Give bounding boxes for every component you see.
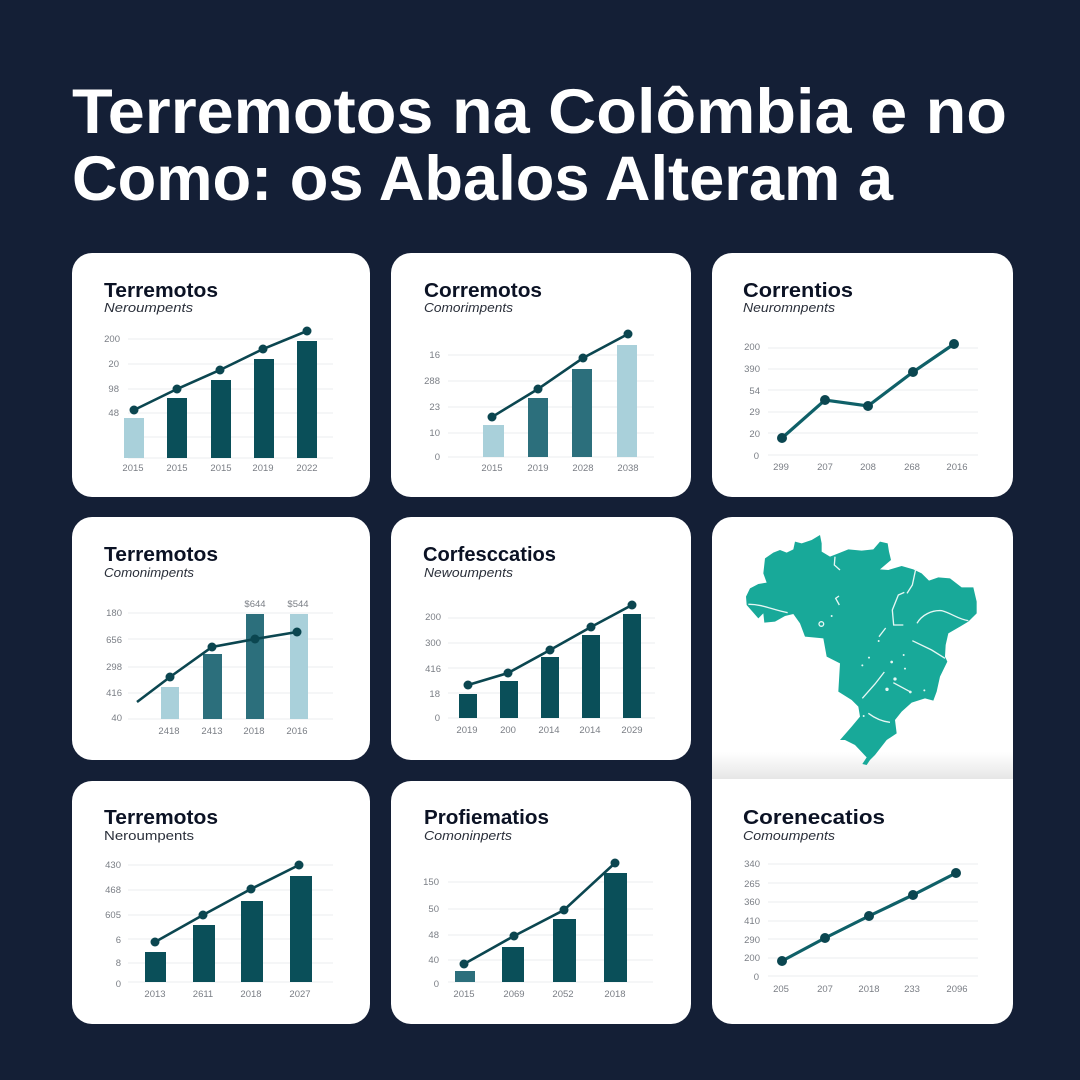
chart: 2015 xyxy=(481,463,503,474)
chart: 656 xyxy=(106,635,122,646)
chart: 605 xyxy=(105,910,121,921)
panel: Terremotos bar and line chart, bottom left xyxy=(72,781,370,1024)
chart: 2015 xyxy=(166,463,188,474)
chart: 2019 xyxy=(252,463,274,474)
chart: 2018 xyxy=(858,984,880,995)
chart: 40 xyxy=(428,955,439,966)
chart: 207 xyxy=(817,462,833,473)
chart: 40 xyxy=(111,713,122,724)
panel: map xyxy=(712,517,1013,780)
title xyxy=(72,77,1007,214)
panel: Corenecatios line chart, bottom right xyxy=(712,780,1013,1024)
panel: Corremotos bar and line chart, top middle xyxy=(391,253,691,497)
chart xyxy=(105,860,333,1000)
chart: 288 xyxy=(424,376,440,387)
title: Como: os Abalos Alteram a xyxy=(72,144,894,214)
subheading: Newoumpents xyxy=(424,565,514,580)
chart: 2016 xyxy=(286,726,308,737)
chart: 200 xyxy=(744,342,760,353)
chart xyxy=(425,600,655,736)
chart: 2015 xyxy=(453,989,475,1000)
chart: 50 xyxy=(428,904,439,915)
chart: 390 xyxy=(744,364,760,375)
heading: Terremotos xyxy=(104,807,218,829)
chart: 2418 xyxy=(158,726,180,737)
chart: 16 xyxy=(429,350,440,361)
panel: Terremotos bar and line chart, middle left xyxy=(72,517,370,760)
chart: 268 xyxy=(904,462,920,473)
heading: Terremotos xyxy=(104,544,218,566)
chart: 2611 xyxy=(193,989,213,1000)
chart: 2018 xyxy=(604,989,626,1000)
chart: 299 xyxy=(773,462,789,473)
chart: 2019 xyxy=(527,463,549,474)
chart: 0 xyxy=(754,972,759,983)
chart: 20 xyxy=(749,429,760,440)
chart: 2018 xyxy=(243,726,265,737)
heading: Corremotos xyxy=(424,280,542,302)
subheading: Neuromnpents xyxy=(743,300,836,315)
chart: 98 xyxy=(108,384,119,395)
chart: 6 xyxy=(116,935,121,946)
chart: 2413 xyxy=(201,726,223,737)
heading: Corenecatios xyxy=(743,807,885,829)
chart: 48 xyxy=(428,930,439,941)
chart: 20 xyxy=(108,359,119,370)
chart: 200 xyxy=(104,334,120,345)
chart: 2014 xyxy=(579,725,601,736)
chart: 416 xyxy=(106,688,122,699)
subheading: Neroumpents xyxy=(104,300,194,315)
chart: 2013 xyxy=(144,989,166,1000)
chart: 0 xyxy=(435,452,440,463)
chart: 2069 xyxy=(503,989,525,1000)
chart: 0 xyxy=(434,979,439,990)
panel: Corfesccatios bar and line chart, center xyxy=(391,517,691,760)
chart: 2022 xyxy=(296,463,318,474)
chart: 0 xyxy=(754,451,759,462)
chart: 200 xyxy=(425,612,441,623)
chart: 29 xyxy=(749,407,760,418)
heading: Corfesccatios xyxy=(423,544,556,566)
chart: 2029 xyxy=(621,725,643,736)
chart: 340 xyxy=(744,859,760,870)
subheading: Comoninperts xyxy=(424,828,513,843)
chart: 2096 xyxy=(946,984,968,995)
chart: 18 xyxy=(429,689,440,700)
chart: 410 xyxy=(744,916,760,927)
chart: 2015 xyxy=(122,463,144,474)
panel: Correntios line chart, top right xyxy=(712,253,1013,497)
chart: 54 xyxy=(749,386,760,397)
chart: 200 xyxy=(744,953,760,964)
heading: Correntios xyxy=(743,280,853,302)
chart: 468 xyxy=(105,885,121,896)
panel: Terremotos bar and line chart, top left xyxy=(72,253,370,497)
chart: 300 xyxy=(425,638,441,649)
chart: 2028 xyxy=(572,463,594,474)
heading: Profiematios xyxy=(424,807,549,829)
chart: 10 xyxy=(429,428,440,439)
chart: 360 xyxy=(744,897,760,908)
chart: 430 xyxy=(105,860,121,871)
subheading: Comoumpents xyxy=(743,828,836,843)
chart: 2014 xyxy=(538,725,560,736)
chart: 2052 xyxy=(552,989,574,1000)
chart: 205 xyxy=(773,984,789,995)
heading: Terremotos xyxy=(104,280,218,302)
chart xyxy=(744,339,978,473)
chart: 8 xyxy=(116,958,121,969)
chart: 416 xyxy=(425,664,441,675)
chart: 2016 xyxy=(946,462,968,473)
chart: 265 xyxy=(744,879,760,890)
icon: map of Brazil xyxy=(746,535,977,765)
chart: $544 xyxy=(287,599,309,610)
chart: 208 xyxy=(860,462,876,473)
chart: 2038 xyxy=(617,463,639,474)
chart: 150 xyxy=(423,877,439,888)
chart: 200 xyxy=(500,725,516,736)
chart xyxy=(104,326,333,474)
chart: 207 xyxy=(817,984,833,995)
chart: 23 xyxy=(429,402,440,413)
chart: 180 xyxy=(106,608,122,619)
chart xyxy=(424,330,654,474)
subheading: Neroumpents xyxy=(104,828,195,843)
chart: 48 xyxy=(108,408,119,419)
chart xyxy=(744,859,978,995)
chart: 2018 xyxy=(240,989,262,1000)
title: Terremotos na Colômbia e no xyxy=(72,77,1007,147)
chart: 290 xyxy=(744,935,760,946)
chart: $644 xyxy=(244,599,266,610)
chart: 0 xyxy=(116,979,121,990)
subheading: Comorimpents xyxy=(424,300,514,315)
chart: 2015 xyxy=(210,463,232,474)
chart: 2019 xyxy=(456,725,478,736)
panel: Profiematios bar and line chart, bottom middle xyxy=(391,781,691,1024)
subheading: Comonimpents xyxy=(104,565,195,580)
chart: 233 xyxy=(904,984,920,995)
chart: 0 xyxy=(435,713,440,724)
chart: 298 xyxy=(106,662,122,673)
chart: 2027 xyxy=(289,989,311,1000)
chart xyxy=(106,599,333,737)
chart xyxy=(423,858,653,1000)
